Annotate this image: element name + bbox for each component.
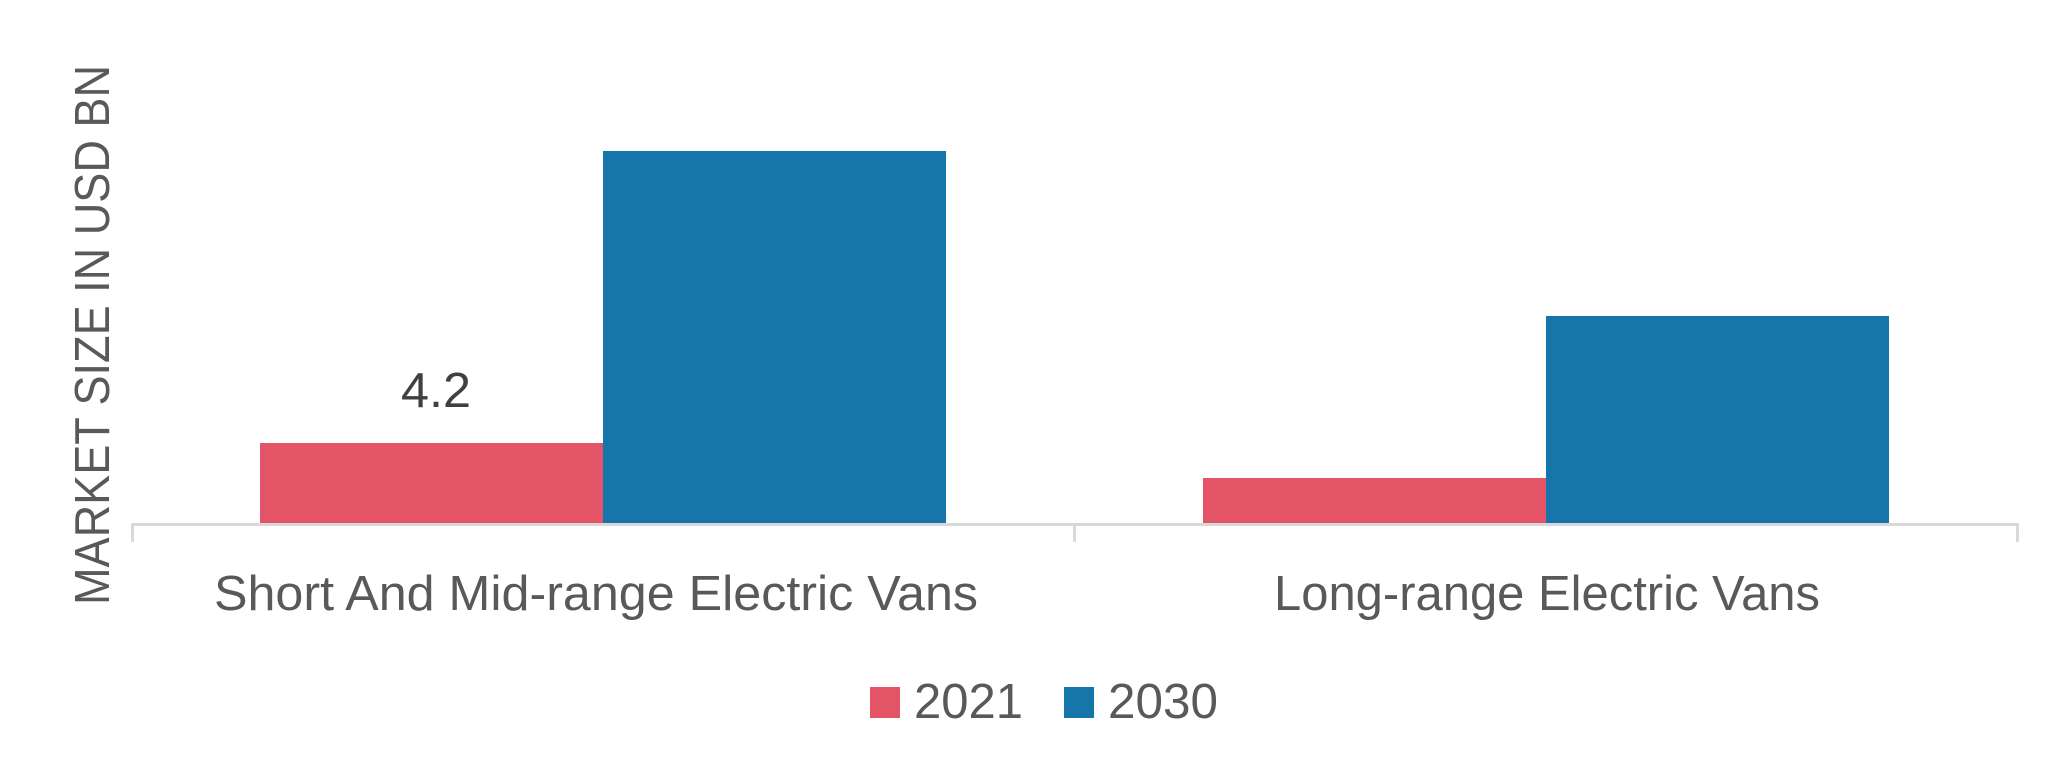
category label: long-range: Long-range Electric Vans	[1274, 567, 1820, 621]
legend item: 2030: 2030	[1108, 675, 1218, 729]
data label: 4.2: 4.2	[401, 364, 471, 418]
bar: 2021 short and mid-range	[260, 443, 603, 523]
legend	[870, 675, 1218, 729]
bar: 2021 long-range	[1203, 478, 1546, 523]
bar: 2030 short and mid-range	[603, 151, 946, 523]
category label: short and mid-range: Short And Mid-range Electric Vans	[214, 567, 978, 621]
bar group: Short And Mid-range Electric Vans	[260, 151, 946, 523]
bar group: Long-range Electric Vans	[1203, 316, 1889, 523]
y-axis title: MARKET SIZE IN USD BN	[66, 65, 120, 605]
legend item: 2021: 2021	[914, 675, 1023, 729]
bar: 2030 long-range	[1546, 316, 1889, 523]
x-axis line with ticks	[131, 523, 2019, 542]
